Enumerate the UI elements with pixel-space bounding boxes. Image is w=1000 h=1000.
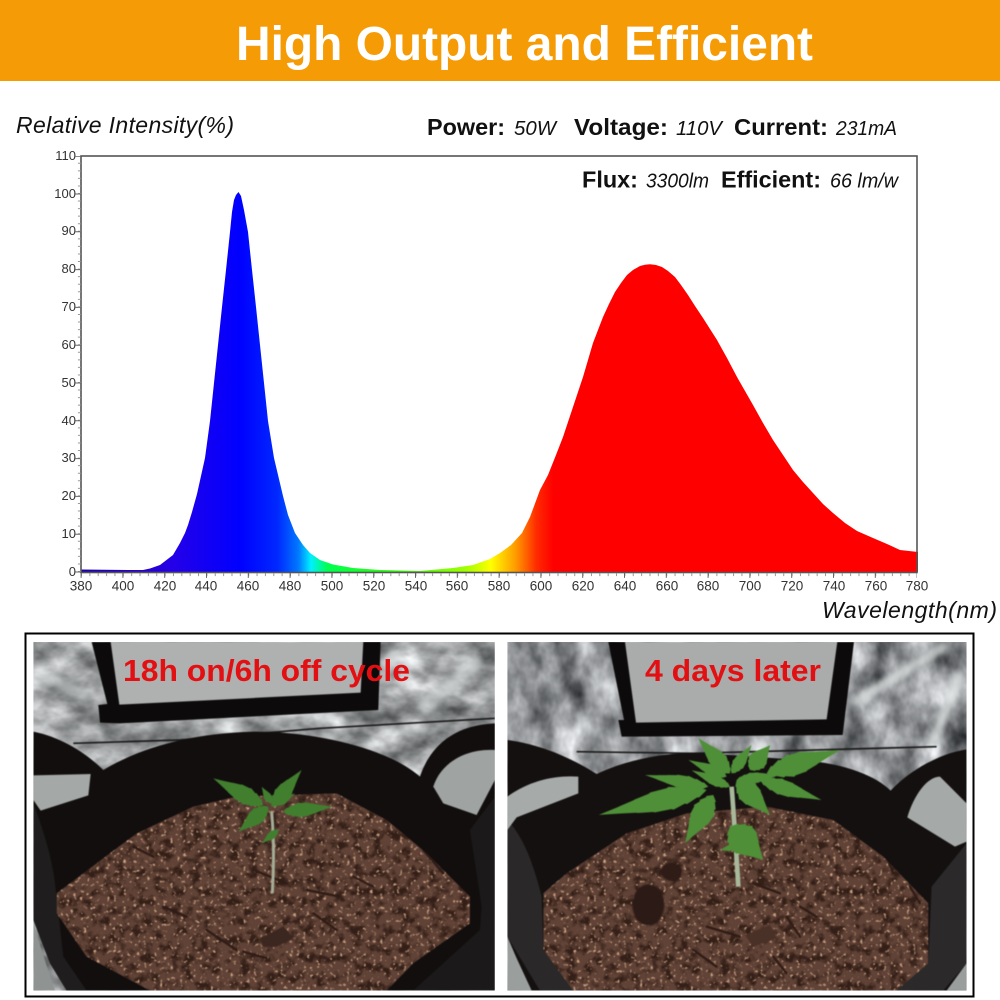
specifications: 3300lm bbox=[646, 170, 709, 192]
reflective tent wall bbox=[507, 642, 967, 991]
x axis labels: 680 bbox=[697, 578, 719, 594]
x axis title: Wavelength(nm) bbox=[822, 597, 997, 623]
foil corner bbox=[33, 922, 55, 991]
specifications: 50W bbox=[514, 118, 558, 140]
banner bbox=[0, 0, 1000, 81]
foil corners bbox=[507, 938, 532, 991]
x axis labels: 440 bbox=[195, 578, 217, 594]
plant bbox=[596, 732, 844, 887]
specifications: Power: bbox=[427, 114, 505, 140]
x axis labels: 400 bbox=[112, 578, 134, 594]
foil highlights bbox=[40, 650, 480, 710]
bark chips bbox=[693, 857, 920, 973]
reflective tent wall bbox=[33, 642, 495, 991]
specifications: 231mA bbox=[835, 118, 897, 140]
y axis labels: 40 bbox=[62, 413, 76, 428]
x axis labels: 480 bbox=[279, 578, 301, 594]
y axis labels: 30 bbox=[62, 450, 76, 465]
tent window frame bbox=[608, 642, 854, 737]
x axis labels: 620 bbox=[572, 578, 594, 594]
y axis labels: 80 bbox=[62, 261, 76, 276]
pot handle opening right bbox=[433, 750, 495, 815]
bark chips bbox=[133, 847, 443, 958]
y axis title: Relative Intensity(%) bbox=[16, 112, 234, 138]
x axis labels: 420 bbox=[154, 578, 176, 594]
soil bbox=[540, 803, 933, 993]
x axis labels: 660 bbox=[656, 578, 678, 594]
title: High Output and Efficient bbox=[236, 18, 813, 71]
specifications: Efficient: bbox=[721, 166, 821, 192]
x axis labels: 560 bbox=[446, 578, 468, 594]
pot handle opening left bbox=[507, 776, 578, 830]
x axis labels: 580 bbox=[488, 578, 510, 594]
x axis labels: 760 bbox=[865, 578, 887, 594]
foil highlights bbox=[853, 645, 960, 743]
y axis labels: 0 bbox=[69, 564, 76, 579]
fabric pot bbox=[33, 723, 495, 991]
plot frame bbox=[81, 156, 917, 572]
caption: second photo: 4 days later bbox=[645, 653, 821, 688]
y axis labels: 20 bbox=[62, 488, 76, 503]
x axis labels bbox=[70, 578, 928, 594]
tent window frame bbox=[92, 642, 381, 723]
spectrum area bbox=[81, 192, 918, 572]
seedling bbox=[209, 765, 333, 893]
specifications bbox=[427, 114, 900, 192]
x axis labels: 520 bbox=[363, 578, 385, 594]
x axis labels: 640 bbox=[614, 578, 636, 594]
caption: first photo: 18h on/6h off cycle bbox=[123, 653, 410, 688]
spectrum chart bbox=[54, 148, 928, 594]
tent seam bbox=[73, 718, 495, 743]
specifications: Flux: bbox=[582, 166, 638, 192]
photo panel frame bbox=[26, 634, 974, 996]
y axis labels: 70 bbox=[62, 299, 76, 314]
x axis labels: 780 bbox=[906, 578, 928, 594]
pot handle opening right bbox=[907, 777, 967, 847]
specifications: 66 lm/w bbox=[830, 170, 900, 192]
x axis labels: 700 bbox=[739, 578, 761, 594]
x axis labels: 380 bbox=[70, 578, 92, 594]
x axis labels: 740 bbox=[823, 578, 845, 594]
specifications: Voltage: bbox=[574, 114, 668, 140]
x axis labels: 540 bbox=[405, 578, 427, 594]
pot handle opening left bbox=[33, 774, 91, 811]
y axis labels: 100 bbox=[54, 186, 76, 201]
specifications: 110V bbox=[676, 118, 724, 140]
specifications: Current: bbox=[734, 114, 828, 140]
y axis labels: 10 bbox=[62, 526, 76, 541]
y axis labels: 60 bbox=[62, 337, 76, 352]
photo: seedling at start bbox=[33, 642, 495, 993]
x axis labels: 720 bbox=[781, 578, 803, 594]
y axis labels: 50 bbox=[62, 375, 76, 390]
y axis labels: 110 bbox=[55, 148, 76, 163]
fabric pot bbox=[507, 740, 967, 991]
soil bbox=[53, 790, 473, 993]
y axis labels: 90 bbox=[62, 223, 76, 238]
x axis labels: 500 bbox=[321, 578, 343, 594]
dark holes in soil bbox=[632, 884, 664, 926]
x axis labels: 600 bbox=[530, 578, 552, 594]
tent seam bbox=[577, 747, 937, 753]
photo: plant four days later bbox=[507, 642, 967, 993]
x axis labels: 460 bbox=[237, 578, 259, 594]
y axis labels bbox=[54, 148, 76, 579]
